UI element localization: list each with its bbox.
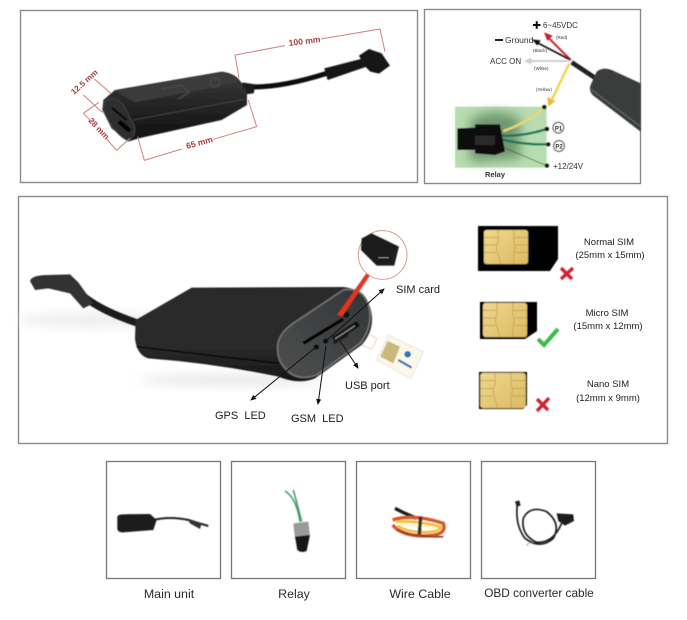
photo: OBD cable bbox=[515, 500, 574, 546]
wiring labels: ACC ON bbox=[490, 57, 521, 66]
label: Wire Cable bbox=[389, 587, 451, 601]
photo: wire cable bbox=[393, 508, 444, 537]
dimension labels: 12.5 mm bbox=[69, 68, 100, 96]
wiring labels: Ground bbox=[505, 35, 534, 45]
SIM size labels: Micro SIM bbox=[586, 308, 628, 319]
wiring labels: Relay bbox=[485, 170, 506, 179]
label: Relay bbox=[278, 587, 311, 601]
wiring labels: P1 bbox=[555, 126, 563, 132]
photo: relay bbox=[285, 490, 310, 552]
SIM size labels: (12mm x 9mm) bbox=[576, 393, 640, 404]
wiring labels: +12/24V bbox=[553, 162, 584, 171]
SIM size labels: (25mm x 15mm) bbox=[575, 250, 645, 261]
wiring labels: 6~45VDC bbox=[543, 21, 578, 30]
inset: SIM slot magnifier bbox=[337, 231, 407, 317]
wire arrows bbox=[524, 32, 571, 168]
dimension labels: 28 mm bbox=[87, 116, 111, 141]
wiring labels: P2 bbox=[555, 144, 563, 150]
icon: red cross nano bbox=[537, 398, 549, 411]
port labels: SIM card bbox=[396, 284, 440, 296]
photo: tracker with cable bbox=[572, 62, 641, 132]
wiring labels: (White) bbox=[534, 66, 549, 71]
port labels: USB port bbox=[345, 380, 390, 392]
SIM size labels: Nano SIM bbox=[587, 379, 629, 390]
wiring labels: (Yellow) bbox=[536, 87, 552, 92]
SIM card illustration bbox=[362, 334, 423, 379]
icon: red cross normal bbox=[561, 268, 573, 279]
dimension labels: 65 mm bbox=[185, 134, 214, 151]
SIM: normal bbox=[478, 226, 558, 271]
port labels bbox=[215, 284, 440, 425]
icon: green check bbox=[538, 329, 558, 345]
SIM: nano bbox=[479, 372, 527, 409]
photo: tracker close-up bbox=[18, 274, 372, 385]
SIM: micro bbox=[480, 302, 537, 339]
dimension lines bbox=[83, 29, 385, 160]
SIM size labels: Normal SIM bbox=[584, 237, 634, 248]
port labels: GPS LED bbox=[215, 410, 266, 422]
dimension labels: 100 mm bbox=[288, 34, 321, 48]
wiring labels: (Black) bbox=[533, 48, 548, 53]
SIM size labels bbox=[573, 237, 645, 404]
photo: main unit bbox=[117, 514, 208, 532]
photo: relay bbox=[455, 107, 547, 168]
wiring labels: (Red) bbox=[556, 35, 568, 40]
panel: device ports and SIM sizes bbox=[18, 196, 667, 444]
dimension labels bbox=[69, 34, 321, 151]
panel: relay bbox=[232, 462, 346, 601]
panel: main unit bbox=[106, 462, 220, 601]
label: Main unit bbox=[144, 587, 195, 601]
label: OBD converter cable bbox=[484, 586, 594, 600]
SIM size labels: (15mm x 12mm) bbox=[573, 321, 643, 332]
wiring labels bbox=[485, 21, 584, 179]
panel: OBD converter cable bbox=[482, 462, 596, 600]
photo: tracker main unit with cable bbox=[102, 49, 390, 142]
panel: wiring diagram bbox=[424, 10, 641, 184]
panel: wire cable bbox=[356, 462, 470, 601]
pointer arrows bbox=[251, 289, 384, 404]
panel: device dimensions bbox=[20, 10, 418, 182]
port labels: GSM LED bbox=[291, 413, 344, 425]
